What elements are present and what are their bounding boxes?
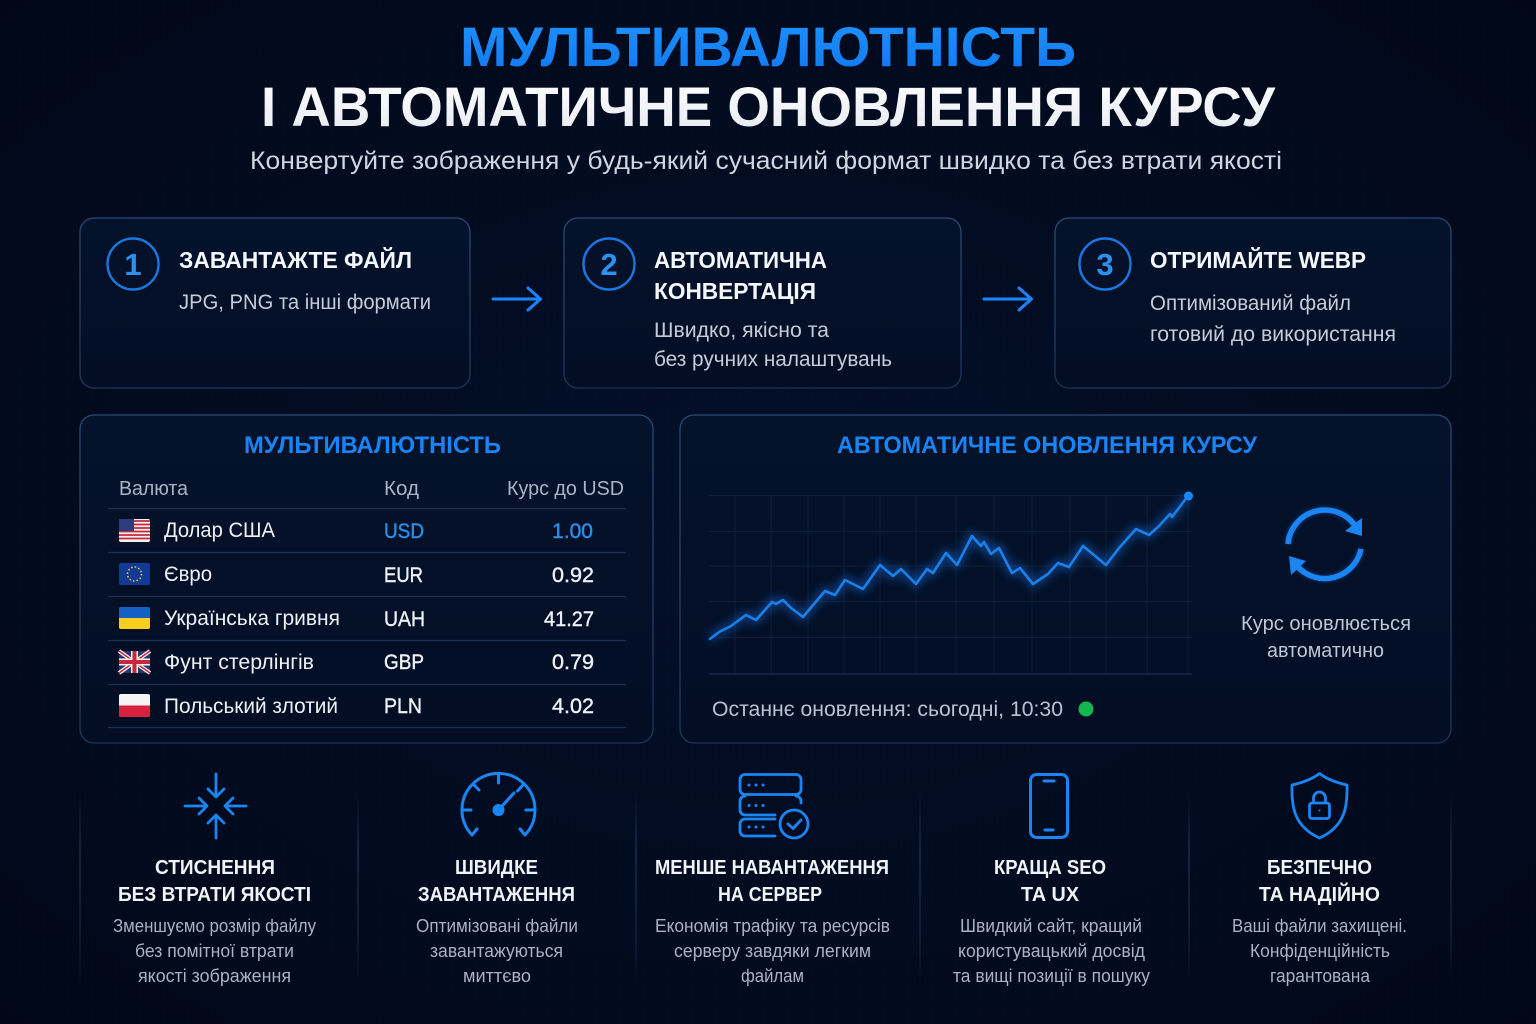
table row: GBP: Фунт стерлінгів — [164, 651, 314, 674]
step 2 heading: КОНВЕРТАЦІЯ — [654, 278, 816, 304]
feature heading: НА СЕРВЕР — [718, 884, 822, 906]
icon: Ukraine flag — [119, 607, 150, 629]
feature description: Економія трафіку та ресурсів — [655, 916, 890, 936]
panel: step 3 — [1055, 218, 1451, 388]
feature description: миттєво — [463, 966, 531, 986]
feature heading: МЕНШЕ НАВАНТАЖЕННЯ — [655, 857, 889, 879]
table column headers: Курс до USD — [507, 478, 624, 500]
line chart — [709, 492, 1193, 675]
feature: safe and reliable — [1232, 774, 1407, 986]
step 3 heading: ОТРИМАЙТЕ WEBP — [1150, 246, 1366, 273]
icon: shield with lock — [1292, 774, 1347, 838]
table row: PLN — [119, 694, 594, 718]
table row: PLN: 4.02 — [552, 695, 594, 718]
table heading: МУЛЬТИВАЛЮТНІСТЬ — [244, 432, 501, 459]
icon: US flag — [119, 519, 150, 542]
feature heading: ШВИДКЕ — [455, 857, 538, 879]
icon: compress arrows — [185, 774, 246, 838]
table column headers: Код — [384, 478, 419, 500]
icon: step number 3: 3 — [1096, 247, 1114, 282]
table column headers: Валюта — [119, 478, 189, 500]
table row: USD: 1.00 — [552, 520, 593, 543]
feature heading — [118, 857, 311, 906]
feature heading — [655, 857, 889, 906]
panel: multicurrency table — [80, 415, 653, 743]
step 2 description — [654, 319, 892, 371]
panel: step 2 — [564, 218, 961, 388]
feature description: Конфіденційність — [1250, 941, 1390, 961]
feature: fast loading — [416, 773, 578, 986]
table row: UAH — [119, 607, 594, 631]
icon: UK flag — [119, 651, 150, 673]
feature description: Швидкий сайт, кращий — [960, 916, 1142, 936]
feature description: Ваші файли захищені. — [1232, 916, 1407, 936]
title — [261, 15, 1276, 138]
last update note: Останнє оновлення: сьогодні, 10:30 — [712, 698, 1063, 721]
step 2 heading — [654, 247, 827, 304]
title: МУЛЬТИВАЛЮТНІСТЬ — [460, 15, 1076, 78]
icon: step number 1 — [108, 238, 158, 290]
feature description: гарантована — [1270, 966, 1371, 986]
feature description: якості зображення — [138, 966, 291, 986]
table row: EUR: EUR — [384, 564, 423, 587]
feature heading: КРАЩА SEO — [994, 857, 1106, 879]
icon: step number 1: 1 — [124, 247, 142, 282]
feature heading: БЕЗ ВТРАТИ ЯКОСТІ — [118, 884, 311, 906]
feature heading: ТА НАДІЙНО — [1259, 882, 1380, 906]
feature description: Зменшуємо розмір файлу — [113, 916, 316, 936]
table row: GBP: GBP — [384, 651, 424, 674]
feature description: та вищі позиції в пошуку — [953, 966, 1150, 986]
table row: GBP: 0.79 — [552, 651, 594, 674]
step 3 description — [1150, 292, 1396, 346]
feature description: Оптимізовані файли — [416, 916, 578, 936]
feature description: завантажуються — [430, 941, 563, 961]
feature heading: ТА UX — [1021, 884, 1080, 906]
feature heading — [418, 857, 575, 906]
table row: UAH: Українська гривня — [164, 607, 340, 630]
table column headers — [119, 478, 624, 500]
table row: UAH: UAH — [384, 608, 425, 631]
rate panel heading: АВТОМАТИЧНЕ ОНОВЛЕННЯ КУРСУ — [837, 432, 1258, 459]
icon: step number 2 — [584, 238, 634, 290]
feature description: серверу завдяки легким — [674, 941, 871, 961]
table row: EUR — [119, 563, 594, 587]
feature description: користувацький досвід — [958, 941, 1145, 961]
table row: PLN: PLN — [384, 695, 422, 718]
arrow: step 1 to step 2 — [493, 288, 540, 310]
step 1 description: JPG, PNG та інші формати — [179, 291, 431, 314]
feature: better SEO and UX — [953, 774, 1150, 986]
step 2 description: без ручних налаштувань — [654, 348, 892, 371]
feature heading: СТИСНЕННЯ — [155, 857, 275, 879]
step 2 heading: АВТОМАТИЧНА — [654, 247, 827, 273]
status indicator: green dot — [1078, 702, 1094, 716]
auto update caption: Курс оновлюється — [1241, 613, 1411, 635]
feature description — [655, 916, 890, 986]
feature description — [1232, 916, 1407, 986]
icon: EU flag — [119, 563, 150, 585]
feature description — [113, 916, 316, 986]
auto update caption: автоматично — [1267, 640, 1384, 662]
feature: compression — [113, 774, 316, 986]
icon: server with check — [740, 774, 808, 838]
feature heading: ЗАВАНТАЖЕННЯ — [418, 884, 575, 906]
feature description — [416, 916, 578, 986]
auto update caption — [1241, 613, 1411, 662]
feature description — [953, 916, 1150, 986]
step 1 heading: ЗАВАНТАЖТЕ ФАЙЛ — [179, 246, 412, 273]
icon: step number 3 — [1080, 238, 1130, 290]
arrow: step 2 to step 3 — [984, 288, 1032, 310]
table row: USD: Долар США — [164, 519, 275, 542]
table row: USD — [119, 519, 593, 543]
table row: UAH: 41.27 — [544, 608, 594, 631]
table row: EUR: 0.92 — [552, 564, 594, 587]
table row: EUR: Євро — [164, 563, 212, 586]
icon: refresh arrows — [1288, 510, 1362, 579]
feature heading — [994, 857, 1106, 906]
feature description: без помітної втрати — [135, 941, 294, 961]
feature heading — [1259, 857, 1380, 906]
panel: automatic rate update — [680, 415, 1451, 743]
subtitle: Конвертуйте зображення у будь-який сучасний формат швидко та без втрати якості — [250, 147, 1282, 175]
table row: PLN: Польський злотий — [164, 695, 338, 718]
feature description: файлам — [741, 966, 804, 986]
icon: Poland flag — [119, 694, 150, 717]
feature heading: БЕЗПЕЧНО — [1267, 857, 1372, 879]
title: І АВТОМАТИЧНЕ ОНОВЛЕННЯ КУРСУ — [261, 75, 1276, 138]
table row: GBP — [119, 651, 594, 674]
step 3 description: Оптимізований файл — [1150, 292, 1351, 315]
step 2 description: Швидко, якісно та — [654, 319, 829, 342]
icon: step number 2: 2 — [600, 247, 618, 282]
step 3 description: готовий до використання — [1150, 323, 1396, 346]
feature: lower server load — [655, 774, 890, 986]
table row: USD: USD — [384, 520, 424, 543]
icon: speedometer — [462, 773, 535, 835]
icon: smartphone — [1030, 774, 1068, 838]
panel: step 1 — [80, 218, 470, 388]
